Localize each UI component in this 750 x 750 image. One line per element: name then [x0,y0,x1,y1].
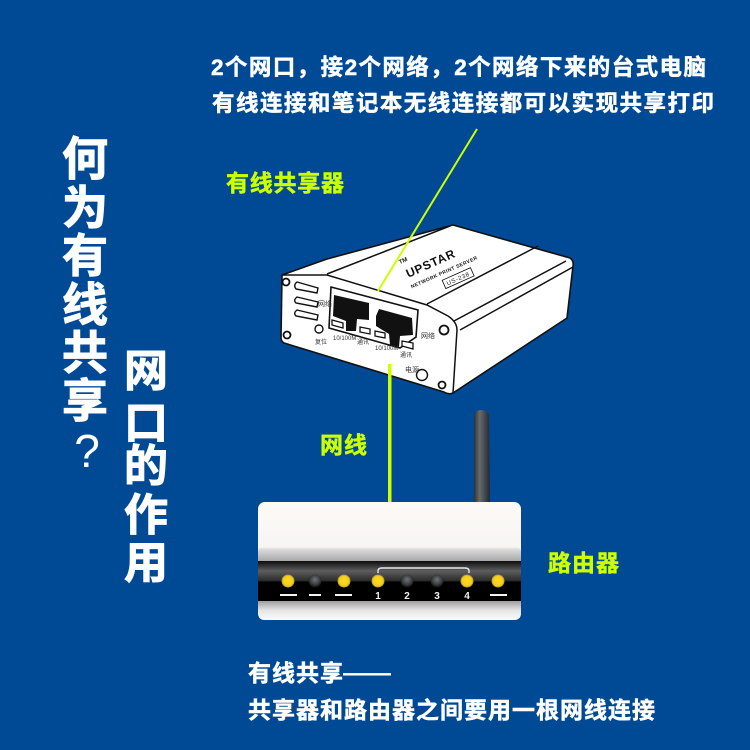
port indicators [332,320,413,349]
brand print on top: US-238 [446,272,471,287]
buttons [315,325,428,380]
tiny front labels: 10/100M [333,336,356,342]
network cable [388,364,392,503]
bottom caption: 有线共享 [248,660,343,686]
vertical title: what is wired sharing: ? [74,425,100,477]
vertical title: what is wired sharing: 为 [62,182,108,234]
vertical subtitle: role of network port: 作 [124,491,168,540]
ethernet port right [376,309,413,347]
vertical title: what is wired sharing: 共 [62,327,108,379]
tiny front labels: 通讯 [357,338,369,346]
label: router: 路由器 [548,550,619,576]
vertical title: what is wired sharing: 有 [62,230,108,282]
tiny front labels: 复位 [315,338,327,346]
port numbers: 1 [375,591,381,602]
vertical title: what is wired sharing [62,133,108,477]
vertical title: what is wired sharing: 享 [62,375,108,427]
brand print on top: TM [398,257,409,266]
top description text: 有线连接和笔记本无线连接都可以实现共享打印 [212,90,714,116]
bracket [378,568,469,573]
bottom caption: 共享器和路由器之间要用一根网线连接 [248,697,655,723]
brand print on top: UPSTAR [404,247,457,281]
vertical subtitle: role of network port: 网 [124,347,168,396]
tiny front labels: 网络 [421,331,435,340]
brand print on top: NETWORK PRINT SERVER [410,255,479,290]
LEDs [282,574,504,588]
bottom caption [248,660,655,723]
pointer line: callout to ports [378,129,477,291]
port numbers: 3 [434,591,440,602]
vertical subtitle: role of network port: 用 [124,539,168,588]
tiny front labels [315,299,435,374]
router lower lip [258,601,521,620]
port numbers [375,591,470,602]
tiny front labels: 10/100M [375,346,398,352]
vertical title: what is wired sharing: 线 [62,279,108,331]
top description text [211,54,714,116]
tiny front labels: 通讯 [400,351,412,359]
antenna [474,410,490,502]
icon: print server device [281,225,573,394]
device edges [282,226,573,393]
LED dashes [280,594,507,596]
port numbers: 2 [404,591,410,602]
vertical subtitle: role of network port: 口 [124,399,168,448]
label: wired sharer: 有线共享器 [226,170,344,196]
top description text: 2个网口，接2个网络，2个网络下来的台式电脑 [211,54,706,80]
router body [258,502,521,620]
vertical subtitle: role of network port [124,347,168,588]
icon: router [258,410,521,620]
tiny front labels: 网络 [318,299,332,308]
screws [282,278,448,388]
bottom caption: —— [343,660,391,687]
router ledge [258,547,521,562]
port numbers: 4 [464,591,470,602]
ethernet port left [333,295,369,331]
label: network cable: 网线 [320,432,367,458]
port panel [329,287,418,348]
tiny front labels: 电源 [405,365,419,374]
vent slots [295,282,318,320]
indicator band [258,561,521,601]
vertical title: what is wired sharing: 何 [62,133,108,185]
vertical subtitle: role of network port: 的 [124,442,168,491]
brand print on top [398,231,484,302]
device body [281,225,573,394]
